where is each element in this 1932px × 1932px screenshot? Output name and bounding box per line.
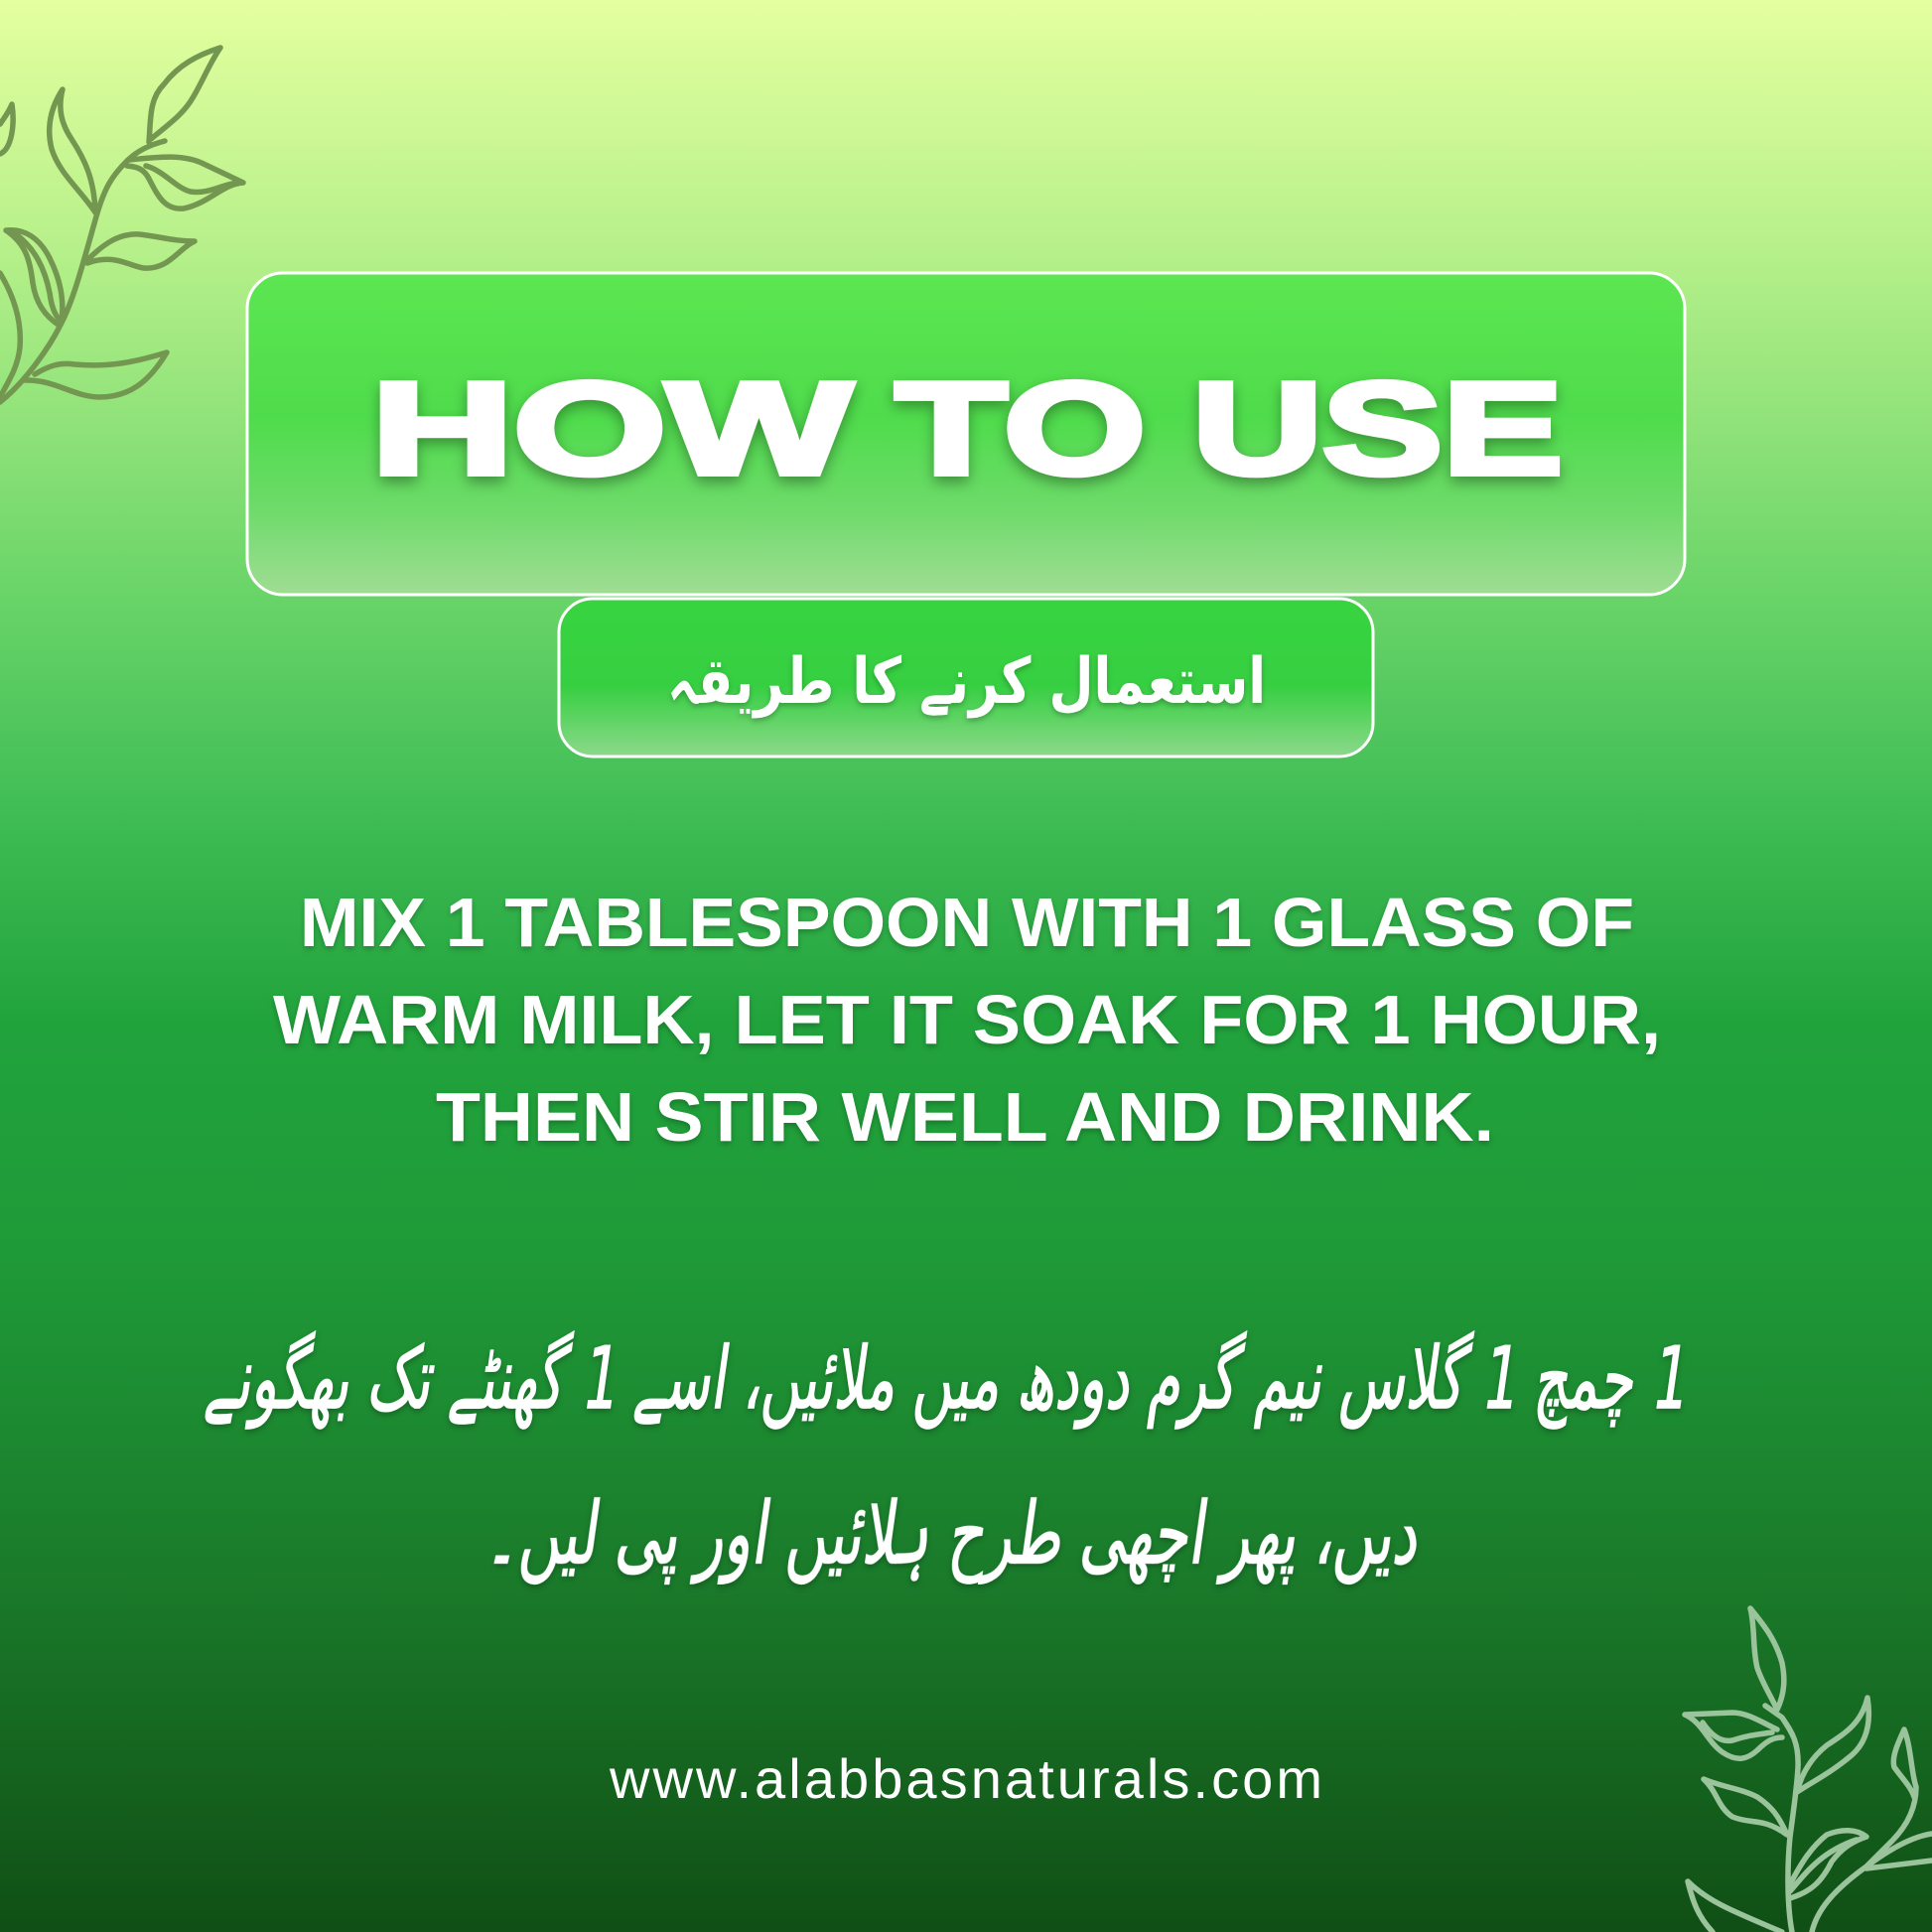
text block: Urdu instructions bbox=[201, 1329, 1696, 1584]
heading: HOW TO USE bbox=[371, 355, 1563, 501]
panel: title box bbox=[247, 273, 1685, 595]
text block: English instructions: MIX 1 TABLESPOON WITH 1 GLASS OF bbox=[300, 884, 1634, 961]
heading: HOW TO USE: USE bbox=[1192, 355, 1563, 501]
text block: English instructions: WARM MILK, LET IT SOAK FOR 1 HOUR, bbox=[273, 981, 1661, 1058]
text block: Urdu instructions: 1 چمچ 1 گلاس نیم گرم دودھ میں ملائیں، اسے 1 گھنٹے تک بھگونے bbox=[201, 1329, 1696, 1429]
website URL: www.alabbasnaturals.com bbox=[609, 1747, 1322, 1810]
heading: HOW TO USE: HOW bbox=[371, 355, 853, 501]
icon: top-left leaf branch bbox=[0, 48, 243, 402]
text block: English instructions: THEN STIR WELL AND DRINK. bbox=[436, 1078, 1494, 1156]
text block: English instructions bbox=[273, 884, 1661, 1156]
heading: HOW TO USE: TO bbox=[896, 355, 1146, 501]
icon: bottom-right leaf branch bbox=[1685, 1608, 1932, 1932]
subtitle: Urdu heading: استعمال کرنے کا طریقہ bbox=[667, 645, 1266, 719]
panel: Urdu subtitle box bbox=[559, 599, 1373, 757]
text block: Urdu instructions: دیں، پھر اچھی طرح ہلائیں اور پی لیں۔ bbox=[482, 1484, 1428, 1584]
